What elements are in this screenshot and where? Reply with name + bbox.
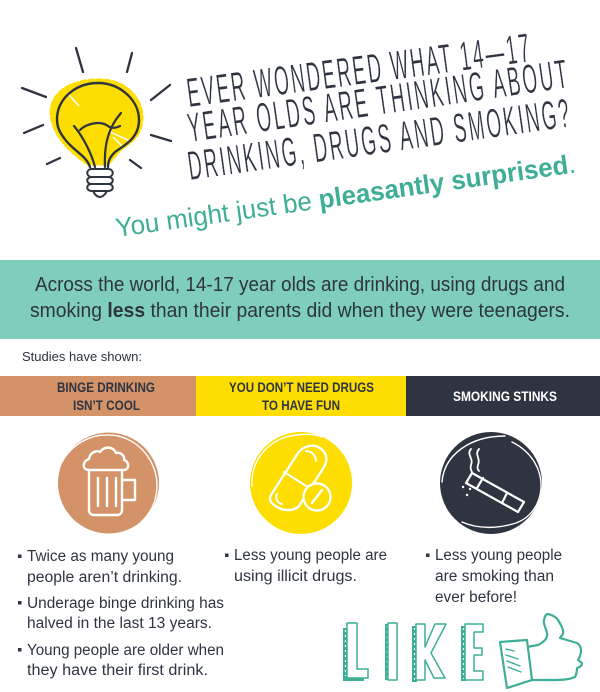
cuff xyxy=(500,640,532,688)
bullets: drugs xyxy=(225,547,387,585)
bullets: binge drinking xyxy=(18,548,224,679)
bullets: binge drinking: Young people are older when xyxy=(27,642,224,659)
icon: cigarette xyxy=(440,432,542,534)
column header: drugs xyxy=(196,376,406,416)
hand xyxy=(527,614,582,680)
like lettering xyxy=(343,623,483,682)
icon: pills xyxy=(250,432,352,534)
bullets: binge drinking: they have their first drink. xyxy=(27,662,208,679)
banner text: Across the world, 14-17 year olds are drinking, using drugs and xyxy=(35,274,565,296)
icon: thumbs up xyxy=(500,614,582,688)
icon: light bulb xyxy=(22,48,171,197)
bullets: drugs: using illicit drugs. xyxy=(234,568,357,585)
letter L xyxy=(347,623,368,678)
title: EVER WONDERED WHAT 14—17 xyxy=(184,24,532,116)
cuff lines xyxy=(506,649,521,672)
banner: smoking less than their parents did when they were teenagers. xyxy=(30,300,570,322)
column header: smoking xyxy=(406,376,600,416)
bullets: drugs: Less young people are xyxy=(234,547,387,564)
bullets: smoking: Less young people xyxy=(435,547,562,564)
bullets: smoking: are smoking than xyxy=(435,568,554,585)
column header: smoking: SMOKING STINKS xyxy=(453,388,557,404)
bulb rays xyxy=(22,48,171,168)
subtitle: You might just be pleasantly surprised. xyxy=(114,149,577,243)
bullets: binge drinking: Twice as many young xyxy=(27,548,174,565)
bullets: smoking: ever before! xyxy=(435,589,517,606)
title: YEAR OLDS ARE THINKING ABOUT xyxy=(185,51,570,151)
bulb screw base xyxy=(87,169,113,197)
column header: binge drinking: ISN’T COOL xyxy=(73,397,140,413)
title xyxy=(184,24,572,189)
letter shadows xyxy=(343,624,466,682)
bulb filament xyxy=(74,113,121,167)
column header: drugs: TO HAVE FUN xyxy=(262,397,340,413)
bullets: smoking xyxy=(426,547,562,606)
letter E xyxy=(465,624,483,680)
icon: beer mug xyxy=(58,432,159,534)
bullets: binge drinking: people aren’t drinking. xyxy=(27,569,182,586)
shadow hatching xyxy=(346,626,464,680)
bulb yellow fill xyxy=(51,80,142,164)
bulb outline xyxy=(57,83,139,167)
bulb highlights xyxy=(68,94,130,146)
title: DRINKING, DRUGS AND SMOKING? xyxy=(185,90,572,189)
bullets: binge drinking: halved in the last 13 years. xyxy=(27,615,212,632)
letter I xyxy=(388,623,397,680)
letter K xyxy=(416,624,446,680)
bullets: binge drinking: Underage binge drinking has xyxy=(27,595,224,612)
column header: binge drinking: BINGE DRINKING xyxy=(57,379,155,395)
column header: drugs: YOU DON’T NEED DRUGS xyxy=(229,379,374,395)
column header: binge drinking xyxy=(0,376,196,416)
banner xyxy=(0,260,600,339)
studies intro: Studies have shown: xyxy=(22,349,142,364)
